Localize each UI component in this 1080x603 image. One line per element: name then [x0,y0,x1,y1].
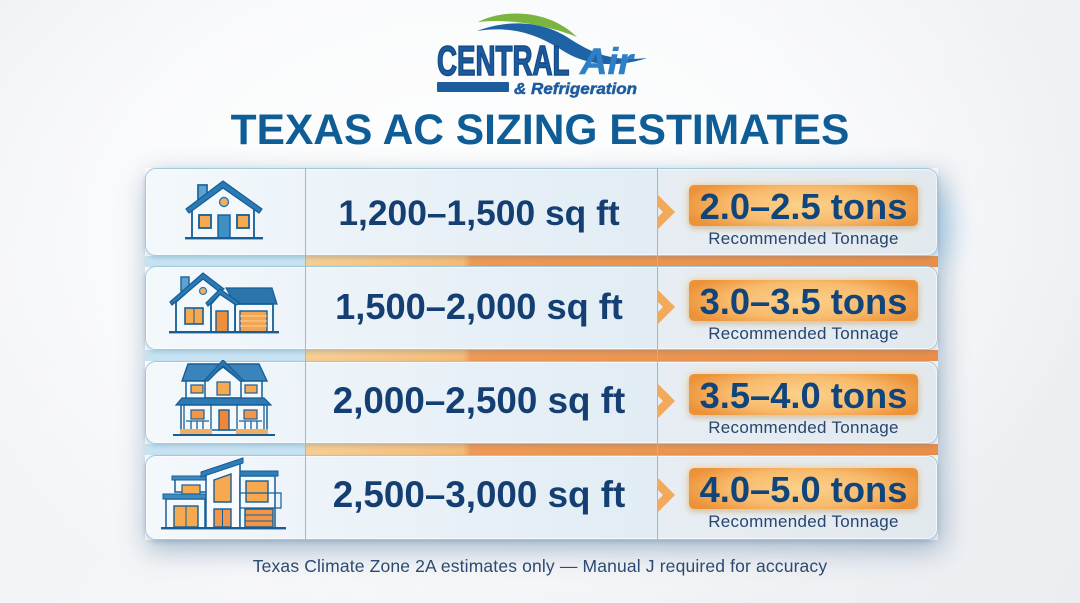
logo word CENTRAL: CENTRAL [437,37,569,84]
row 3 caption: Recommended Tonnage [708,418,899,437]
row 2 [145,266,938,350]
row 4 square footage: 2,500–3,000 sq ft [333,474,625,515]
arrow row 4 [657,477,675,513]
row 1 caption: Recommended Tonnage [708,229,899,248]
arrow row 1 [657,194,675,230]
logo: Central Air & Refrigeration [437,14,647,98]
row 1 square footage: 1,200–1,500 sq ft [338,193,620,233]
logo bar [437,82,509,92]
title: TEXAS AC SIZING ESTIMATES [231,107,849,154]
row 2 tonnage: 3.0–3.5 tons [700,281,907,322]
row 1 [145,168,938,256]
icon: two-storey house with porch [173,360,275,436]
row 2 square footage: 1,500–2,000 sq ft [335,286,623,327]
icon: small house [185,180,263,240]
row 4 tonnage: 4.0–5.0 tons [700,469,907,510]
row 4 [145,455,938,540]
logo word Air: Air [579,41,636,82]
icon: modern house [161,457,286,530]
logo word Refrigeration: & Refrigeration [514,81,637,98]
logo green swoosh [478,13,577,37]
arrow row 3 [657,383,675,419]
logo blue swoosh [477,23,647,64]
row 3 square footage: 2,000–2,500 sq ft [333,380,625,421]
row 3 [145,361,938,444]
row 4 caption: Recommended Tonnage [708,512,899,531]
arrow row 2 [657,289,675,325]
icon: house with garage [169,272,279,334]
footnote: Texas Climate Zone 2A estimates only — Manual J required for accuracy [253,556,827,576]
panel: sizing table [145,168,938,540]
row 1 tonnage: 2.0–2.5 tons [700,186,907,227]
row 3 tonnage: 3.5–4.0 tons [700,375,907,416]
row 2 caption: Recommended Tonnage [708,324,899,343]
